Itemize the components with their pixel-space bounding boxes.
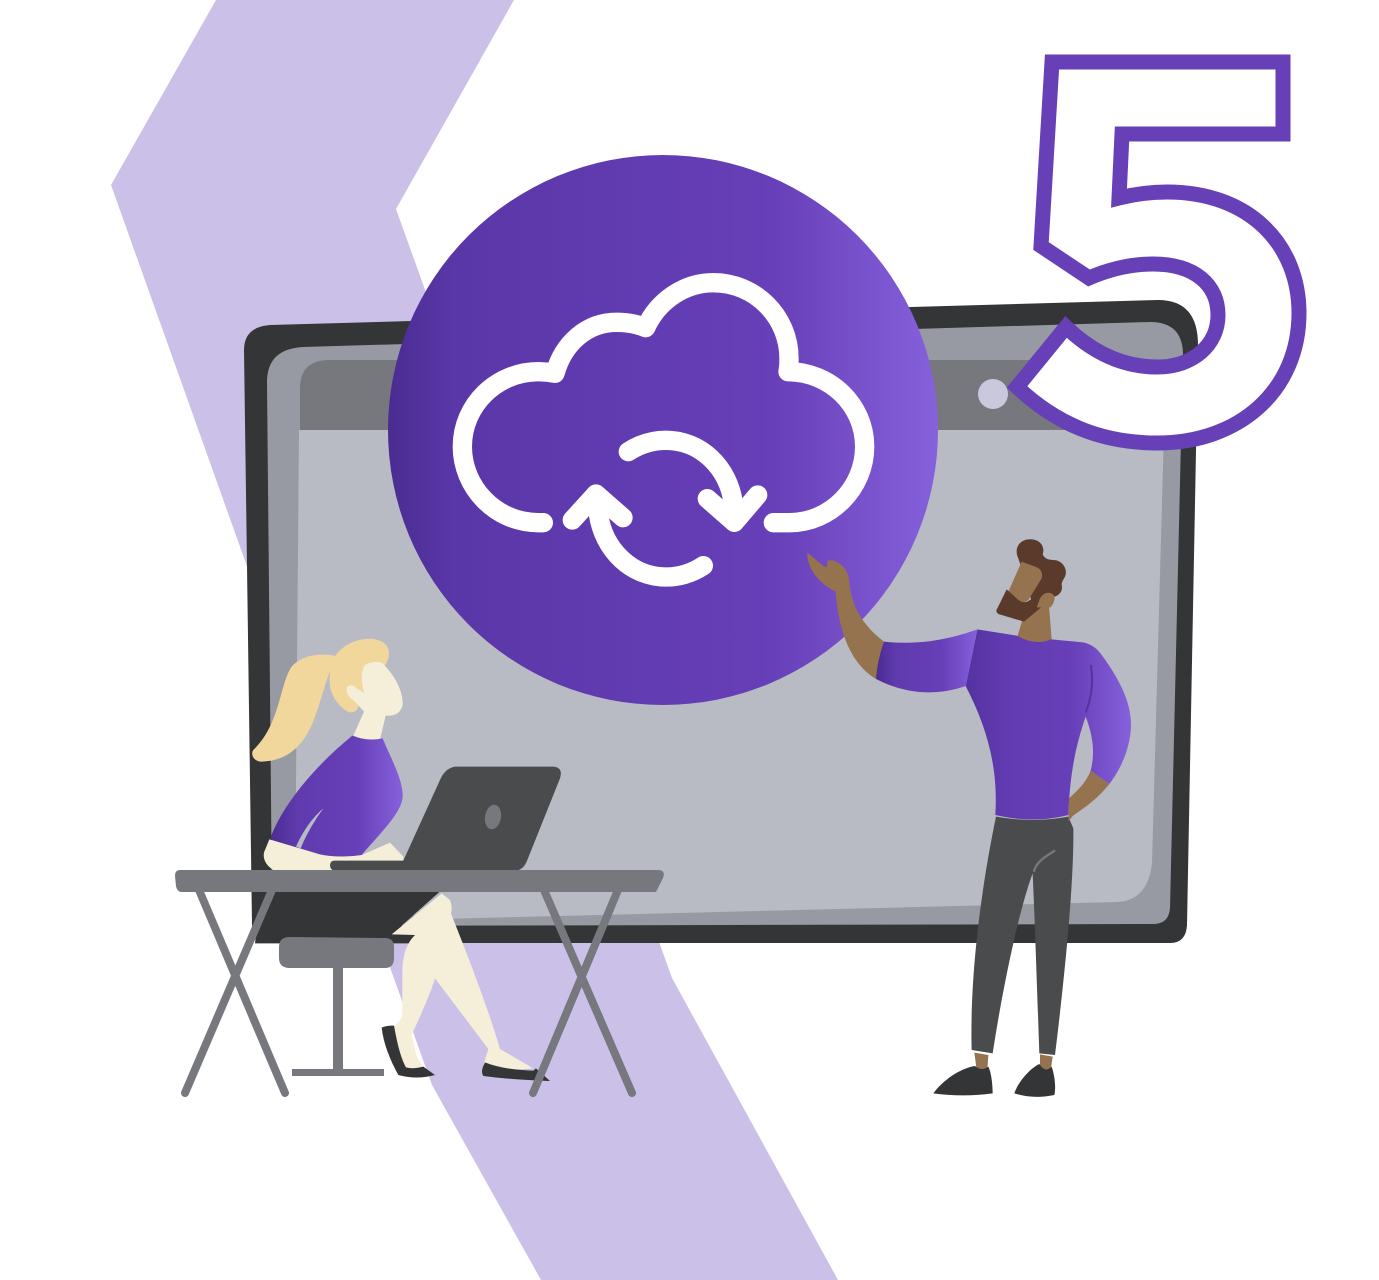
woman sweater [270,736,403,857]
woman face and neck [347,662,403,740]
man face [1008,562,1042,602]
man ankles [974,1053,1053,1071]
woman hair [330,639,389,712]
sync arrow bottom [572,494,703,577]
woman upper body [252,639,403,873]
browser bar [300,360,1100,430]
man upper body [966,539,1131,822]
browser dot [978,379,1008,409]
screen frame [244,300,1198,943]
cloud sync icon [462,283,865,577]
woman ponytail [252,655,337,762]
man torso [966,629,1131,819]
man hair [1017,539,1066,607]
stool [279,937,394,1076]
desk [175,870,664,1093]
man shoes [933,1064,1055,1097]
man raised arm [807,553,977,692]
background chevron [111,0,838,1280]
woman skirt [255,890,442,943]
man beard [996,589,1050,622]
woman lower body [255,890,550,1081]
sync arrow top [628,440,758,522]
man [807,539,1131,1097]
man legs [933,817,1073,1097]
purple circle [388,155,938,705]
number 5 [1017,62,1299,443]
man sleeve [876,629,977,692]
laptop [330,767,561,871]
cloud outline [462,283,865,523]
man neck [1017,597,1052,642]
woman legs [392,893,533,1071]
man forearm behind back [1068,771,1109,822]
woman shoes [382,1026,550,1081]
man ear [1037,593,1055,607]
woman arm [264,839,403,873]
woman [252,639,550,1081]
